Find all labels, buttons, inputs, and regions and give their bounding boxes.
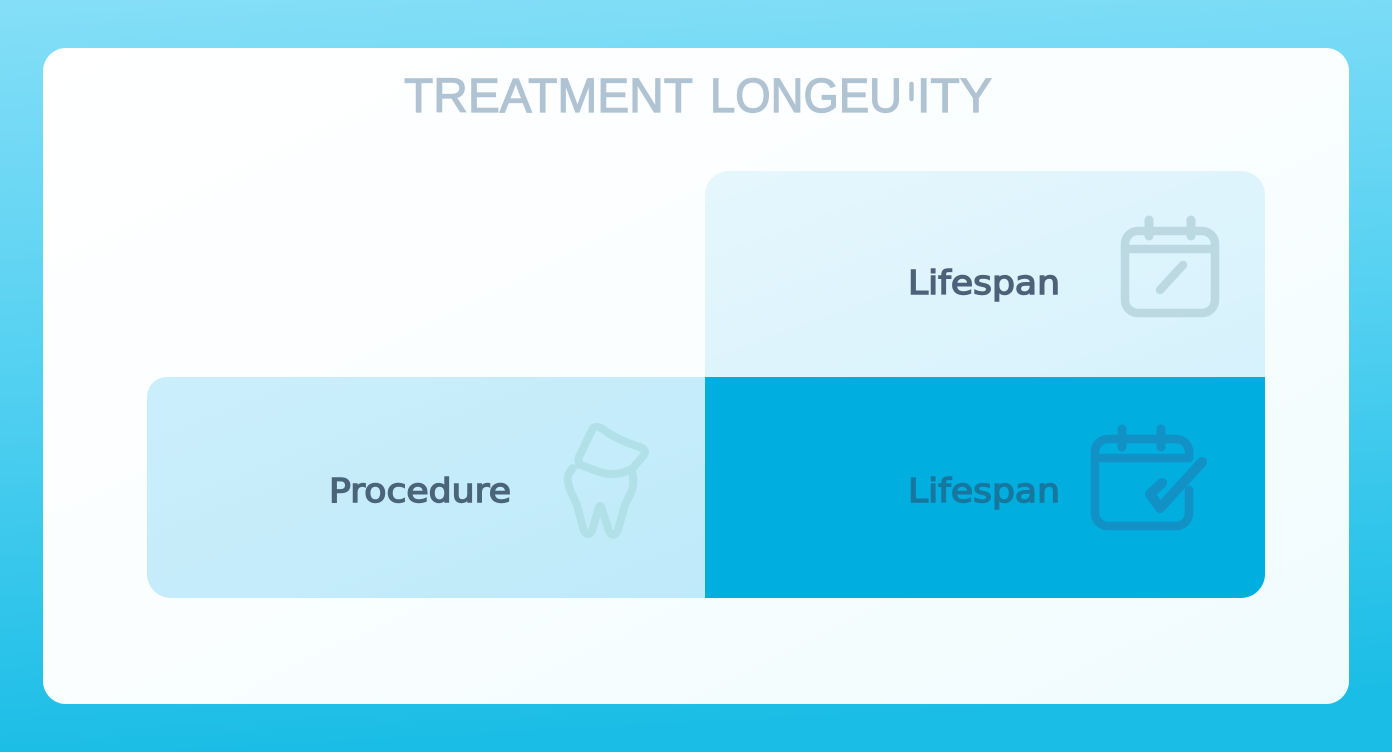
icon: calendar with check — [1095, 429, 1202, 526]
title — [404, 70, 992, 123]
panel: top right lifespan — [705, 171, 1265, 377]
panel: bottom right lifespan — [705, 377, 1265, 598]
title: TREATMENT — [404, 70, 693, 123]
panel: bottom left procedure — [147, 377, 705, 598]
label: lifespan: Lifespan — [908, 264, 1060, 302]
title: ITY — [917, 70, 992, 123]
icon: tooth with crown — [568, 427, 645, 535]
label: procedure: Procedure — [329, 472, 511, 510]
title: LONGEU — [710, 70, 902, 123]
icon: calendar with slash — [1125, 220, 1215, 313]
label: lifespan: Lifespan — [908, 472, 1060, 510]
